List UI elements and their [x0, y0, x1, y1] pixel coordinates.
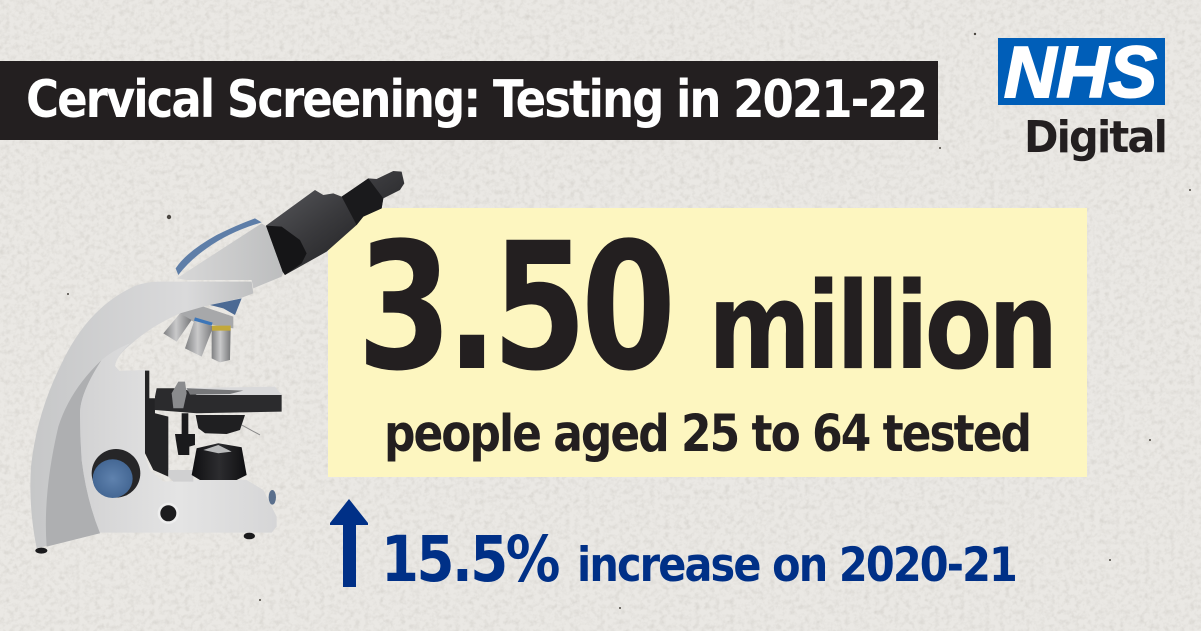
feet	[35, 548, 47, 554]
arm shadow band	[46, 360, 102, 547]
body front	[80, 343, 277, 533]
NHS Digital logo: NHS	[1004, 33, 1157, 113]
focus rod	[175, 413, 195, 455]
change text: increase on 2020-21	[577, 538, 1016, 593]
base top	[168, 470, 193, 482]
headline figure: 3.50	[357, 205, 670, 410]
eyepiece dark face	[266, 226, 307, 275]
NHS Digital logo: Digital	[1024, 112, 1166, 163]
coarse focus knob	[92, 449, 140, 498]
illuminator	[192, 443, 247, 480]
switch	[158, 503, 179, 524]
subheading: people aged 25 to 64 tested	[384, 405, 1030, 464]
microscope illustration	[30, 171, 404, 554]
change text	[381, 523, 1016, 596]
nosepiece blue	[210, 298, 242, 315]
title text: Cervical Screening: Testing in 2021-22	[26, 70, 926, 130]
black column	[145, 371, 168, 477]
right side knob	[269, 490, 276, 505]
eyepiece dark collar	[342, 178, 383, 225]
change text: 15.5%	[381, 523, 559, 596]
head	[177, 223, 285, 288]
blue strip	[176, 218, 262, 275]
arm outer	[30, 282, 253, 548]
NHS Digital logo	[998, 33, 1166, 163]
stage	[155, 388, 282, 413]
objectives	[163, 313, 231, 362]
arrow: increase	[330, 499, 368, 587]
title bar	[0, 61, 938, 140]
nosepiece silver	[180, 307, 233, 328]
unit: million	[708, 258, 1054, 397]
yellow highlight panel	[328, 205, 1087, 477]
condenser	[196, 415, 245, 434]
eyepiece tube	[266, 171, 404, 275]
